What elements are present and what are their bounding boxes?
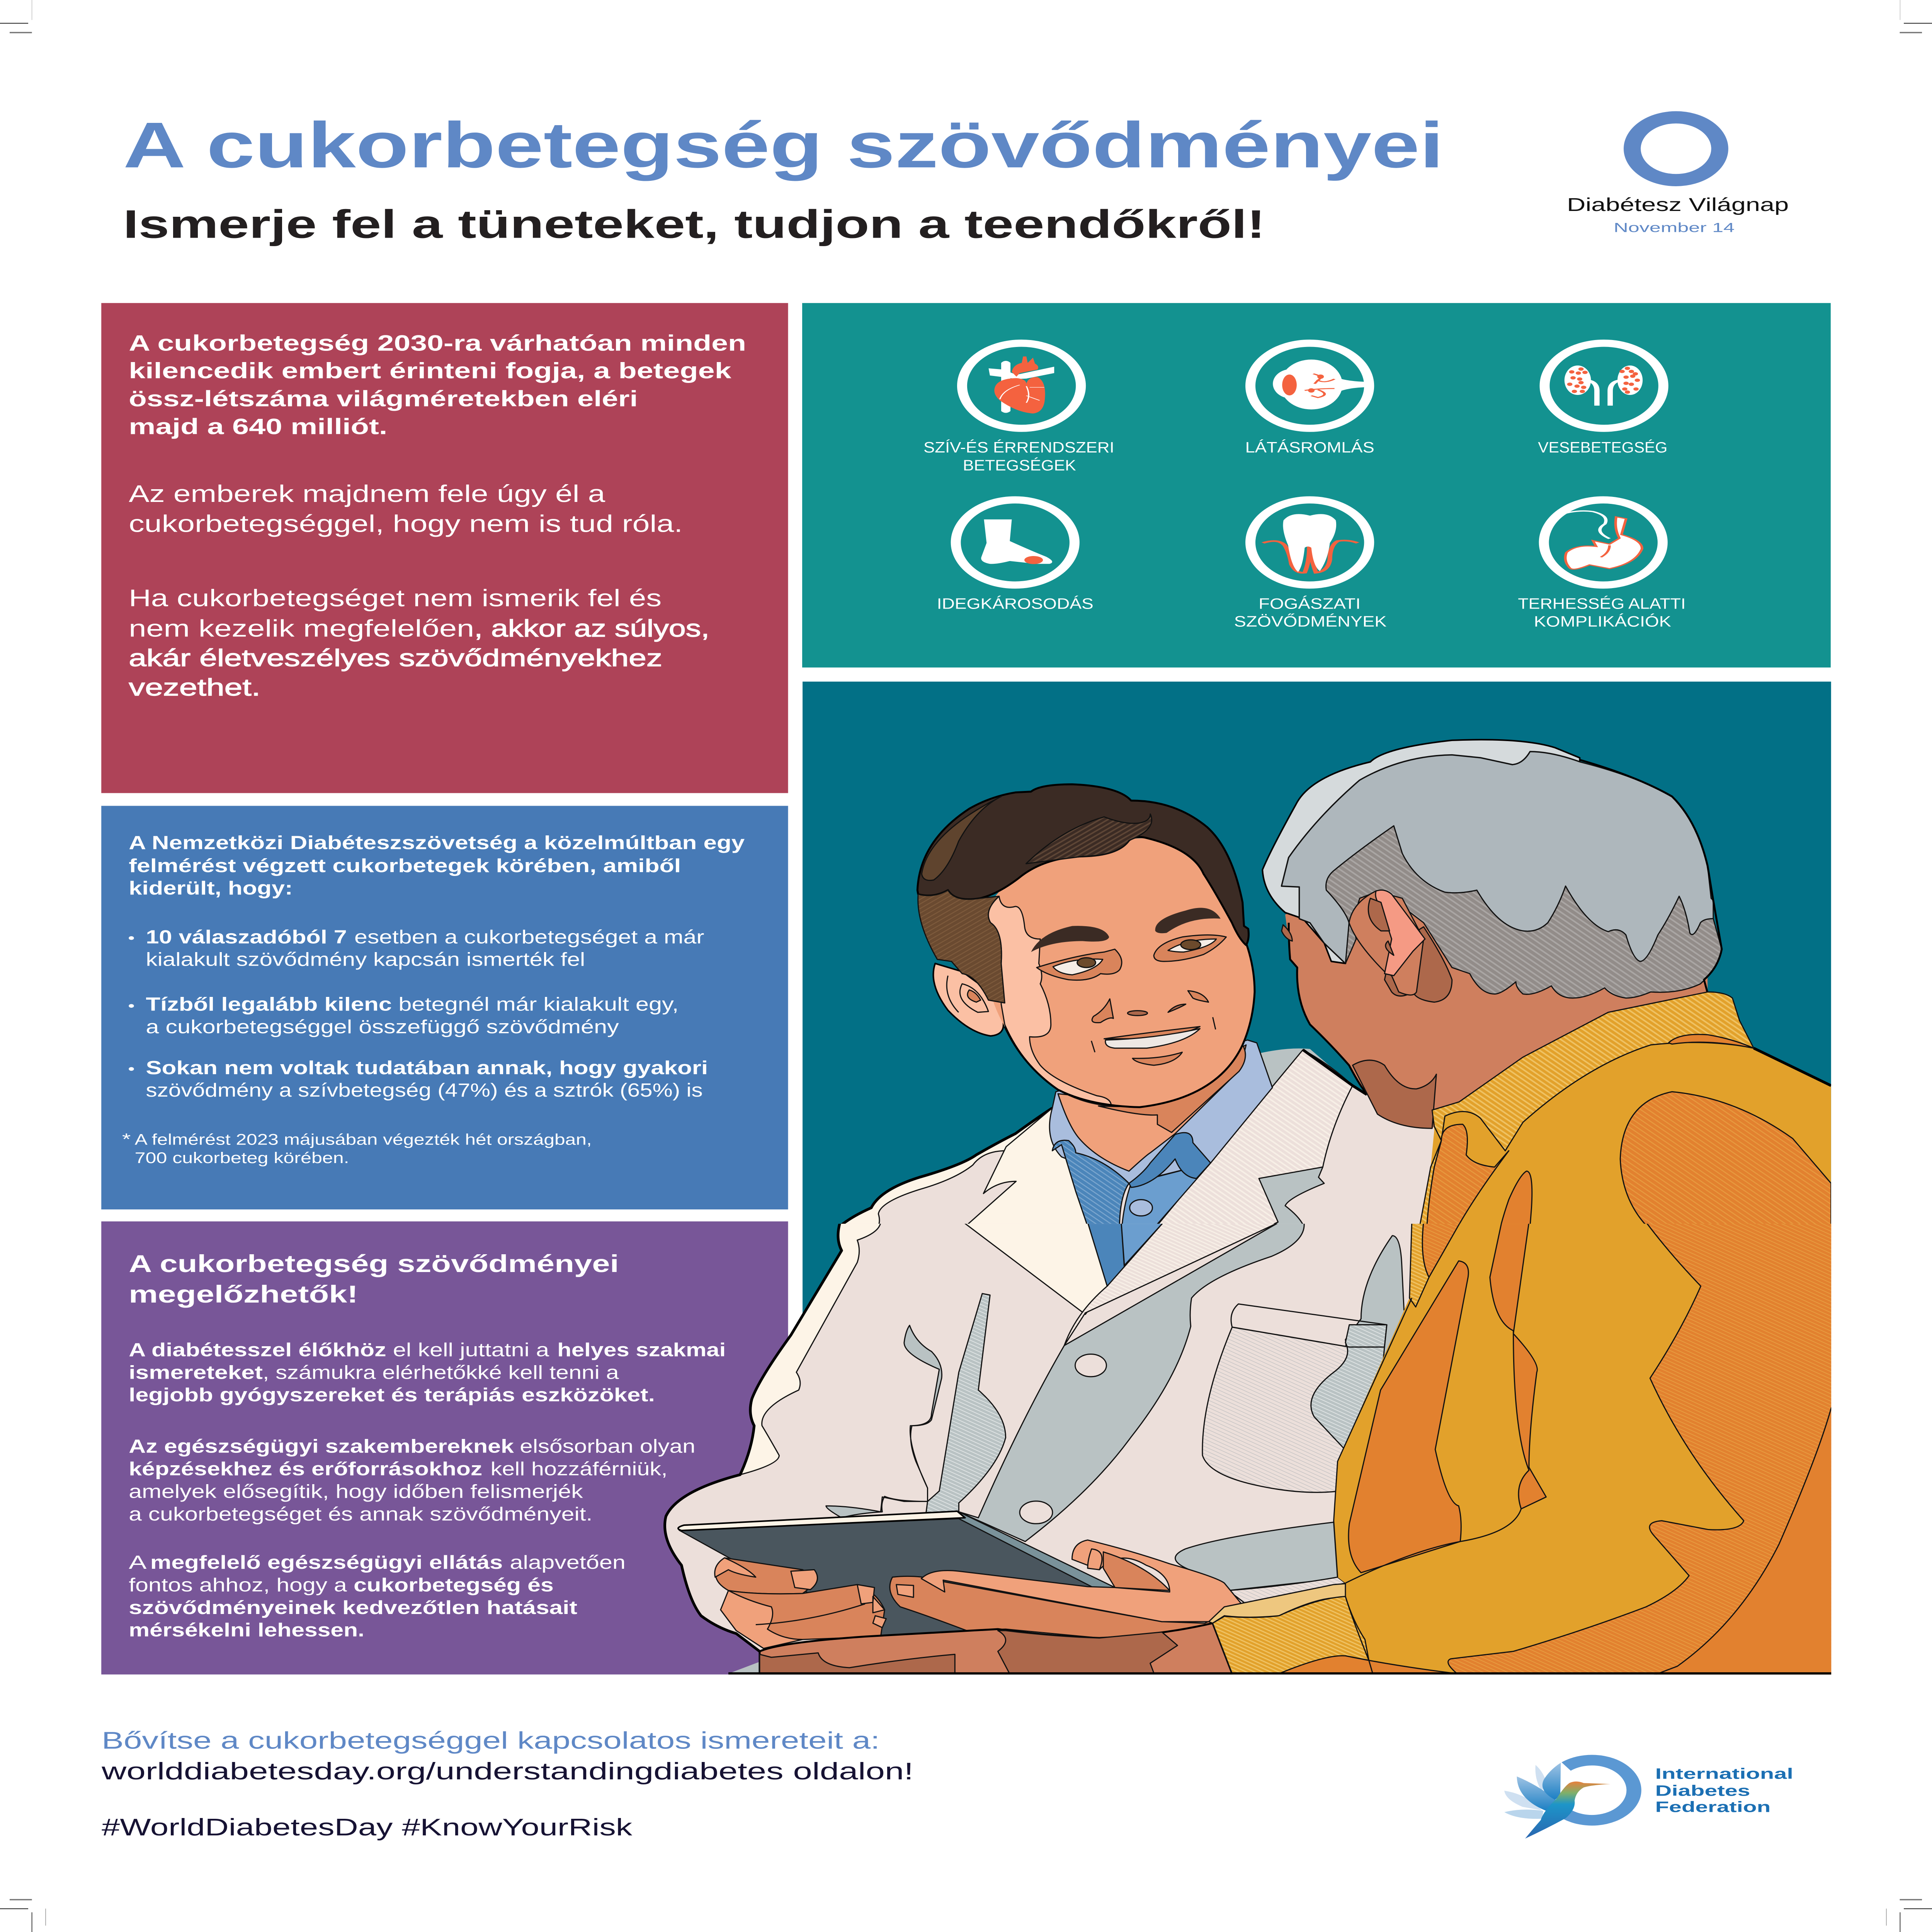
- logo: World Diabetes Day ring: Diabétesz Világnap: [1567, 194, 1789, 215]
- panel: complications are preventable: [101, 1221, 788, 1675]
- panel: survey findings: Tízből legalább kilenc: [146, 993, 392, 1015]
- panel: complications are preventable: el kell juttatni a: [393, 1339, 549, 1361]
- panel: complications are preventable: megfelelő egészségügyi ellátás: [150, 1552, 503, 1573]
- panel: intro statistics: majd a 640 milliót.: [129, 414, 387, 439]
- logo: International Diabetes Federation: Diabetes: [1655, 1782, 1750, 1799]
- panel: intro statistics: össz-létszáma világméretekben eléri: [129, 386, 638, 411]
- panel: survey findings: szövődmény a szívbetegség (47%) és a sztrók (65%) is: [146, 1080, 703, 1101]
- panel: intro statistics: akár életveszélyes szövődményekhez: [129, 645, 662, 671]
- panel: intro statistics: Az emberek majdnem fele úgy él a: [129, 480, 605, 507]
- panel: survey findings: Sokan nem voltak tudatában annak, hogy gyakori: [146, 1057, 708, 1078]
- upper figures: [841, 739, 1831, 1224]
- panel: survey findings: 10 válaszadóból 7: [146, 926, 347, 947]
- lower figures: [665, 1222, 1837, 1675]
- panel: survey findings: felmérést végzett cukorbetegek körében, amiből: [129, 855, 681, 876]
- panel: survey findings: *: [122, 1131, 131, 1148]
- panel: intro statistics: Ha cukorbetegséget nem ismerik fel és: [129, 585, 662, 611]
- logo: World Diabetes Day ring: [1567, 117, 1789, 235]
- patient sweater upper: [1408, 992, 1831, 1317]
- icon: kidneys: [1538, 343, 1667, 456]
- icon: pregnancy: TERHESSÉG ALATTI: [1518, 595, 1685, 612]
- doctor ear: [933, 963, 1003, 1036]
- panel: complications are preventable: helyes szakmai: [557, 1339, 726, 1361]
- subtitle: Ismerje fel a tüneteket, tudjon a teendőkről!: [123, 202, 1265, 247]
- panel: complications are preventable: , számukra elérhetőkké kell tenni a: [263, 1362, 619, 1383]
- doctor coat lower: [665, 1222, 1435, 1673]
- panel: intro statistics: , akkor az súlyos,: [474, 615, 709, 642]
- panel: complications are preventable: alapvetően: [510, 1552, 626, 1573]
- doctor shirt: [1049, 1039, 1273, 1224]
- panel: complications are preventable: A cukorbetegség szövődményei: [129, 1250, 619, 1277]
- panel: intro statistics: nem kezelik megfelelően: [129, 615, 474, 642]
- panel: complication icons: [802, 303, 1831, 667]
- panel: complications are preventable: ismereteket: [129, 1362, 263, 1383]
- logo: International Diabetes Federation: Federation: [1655, 1799, 1770, 1816]
- doctor eyebrows and eyes: [1031, 908, 1226, 980]
- title: A cukorbetegség szövődményei: [123, 109, 1444, 181]
- panel: complications are preventable: legjobb gyógyszereket és terápiás eszközöket.: [129, 1384, 655, 1405]
- panel: complications are preventable: amelyek elősegítik, hogy időben felismerjék: [129, 1481, 583, 1502]
- panel: complications are preventable: fontos ahhoz, hogy a: [129, 1574, 347, 1595]
- panel: survey findings: a cukorbetegséggel összefüggő szövődmény: [146, 1016, 619, 1037]
- panel: complications are preventable: a cukorbetegséget és annak szövődményeit.: [129, 1503, 593, 1525]
- logo: International Diabetes Federation: International: [1655, 1765, 1793, 1782]
- panel: intro statistics: cukorbetegséggel, hogy nem is tud róla.: [129, 510, 683, 537]
- illustration baseline: [728, 1672, 1831, 1675]
- icon: tooth: [1234, 500, 1386, 630]
- panel: complications are preventable: mérsékelni lehessen.: [129, 1619, 364, 1641]
- panel: complications are preventable: Az egészségügyi szakembereknek: [129, 1435, 514, 1457]
- patient ear: [1349, 890, 1425, 995]
- panel: complications are preventable: A: [129, 1552, 146, 1573]
- panel: survey findings: A Nemzetközi Diabéteszszövetség a közelmúltban egy: [129, 832, 745, 853]
- panel: survey findings: kiderült, hogy:: [129, 877, 293, 899]
- patient sleeve cuff: [760, 1623, 1232, 1673]
- panel: intro statistics: A cukorbetegség 2030-ra várhatóan minden: [129, 330, 746, 355]
- icon: eye: [1245, 343, 1374, 456]
- panel: survey findings: esetben a cukorbetegséget a már: [354, 926, 704, 947]
- footer: call to action: Bővítse a cukorbetegséggel kapcsolatos ismereteit a:: [102, 1727, 880, 1754]
- panel: survey findings: [101, 806, 788, 1209]
- icon: pregnancy: KOMPLIKÁCIÓK: [1534, 613, 1671, 630]
- footer: call to action: worlddiabetesday.org/understandingdiabetes oldalon!: [101, 1758, 913, 1784]
- doctor coat upper: [841, 1048, 1434, 1224]
- panel: complications are preventable: kell hozzáférniük,: [490, 1458, 667, 1480]
- panel: survey findings: 700 cukorbeteg körében.: [135, 1150, 349, 1167]
- panel: complications are preventable: megelőzhetők!: [129, 1281, 358, 1308]
- tablet: [678, 1511, 1115, 1638]
- icon: eye: LÁTÁSROMLÁS: [1245, 439, 1374, 456]
- panel: survey findings: kialakult szövődmény kapcsán ismerték fel: [146, 949, 585, 970]
- footer: call to action: [101, 1727, 913, 1784]
- icon: foot: [937, 500, 1094, 612]
- panel: complications are preventable: képzésekhez és erőforrásokhoz: [129, 1458, 482, 1480]
- panel: complications are preventable: szövődményeinek kedvezőtlen hatásait: [129, 1597, 577, 1618]
- panel: survey findings: betegnél már kialakult egy,: [398, 993, 679, 1015]
- panel: survey findings: A felmérést 2023 májusában végezték hét országban,: [135, 1131, 592, 1148]
- panel: intro statistics: [101, 303, 788, 793]
- panel: complications are preventable: cukorbetegség és: [354, 1574, 554, 1595]
- logo: World Diabetes Day ring: November 14: [1614, 220, 1735, 235]
- panel: intro statistics: kilencedik embert érinteni fogja, a betegek: [129, 358, 732, 383]
- footer: hashtags: #WorldDiabetesDay #KnowYourRisk: [102, 1814, 633, 1840]
- illustration: doctor and patient: [665, 740, 1837, 1675]
- icon: foot: IDEGKÁROSODÁS: [937, 595, 1094, 612]
- doctor hair: [917, 784, 1248, 1003]
- icon: kidneys: VESEBETEGSÉG: [1538, 439, 1667, 456]
- panel: complications are preventable: A diabétesszel élőkhöz: [129, 1339, 386, 1361]
- icon: heart: [923, 343, 1114, 474]
- icon: heart: BETEGSÉGEK: [963, 457, 1076, 474]
- patient hair: [1262, 740, 1722, 998]
- doctor face: [987, 838, 1255, 1107]
- patient head: [1282, 841, 1708, 1128]
- panel: intro statistics: vezethet.: [129, 674, 260, 701]
- icon: pregnancy: [1518, 500, 1685, 630]
- icon: tooth: SZÖVŐDMÉNYEK: [1234, 613, 1386, 630]
- doctor neck: [1058, 1045, 1246, 1171]
- panel: complications are preventable: elsősorban olyan: [520, 1435, 696, 1457]
- logo: International Diabetes Federation: [1504, 1760, 1793, 1838]
- illustration background: [803, 682, 1831, 1673]
- patient sweater lower: [1209, 1222, 1837, 1675]
- doctor nose and mouth: [1091, 991, 1216, 1065]
- icon: heart: SZÍV-ÉS ÉRRENDSZERI: [923, 439, 1114, 456]
- icon: tooth: FOGÁSZATI: [1259, 595, 1361, 612]
- doctor hands: [715, 1540, 1244, 1648]
